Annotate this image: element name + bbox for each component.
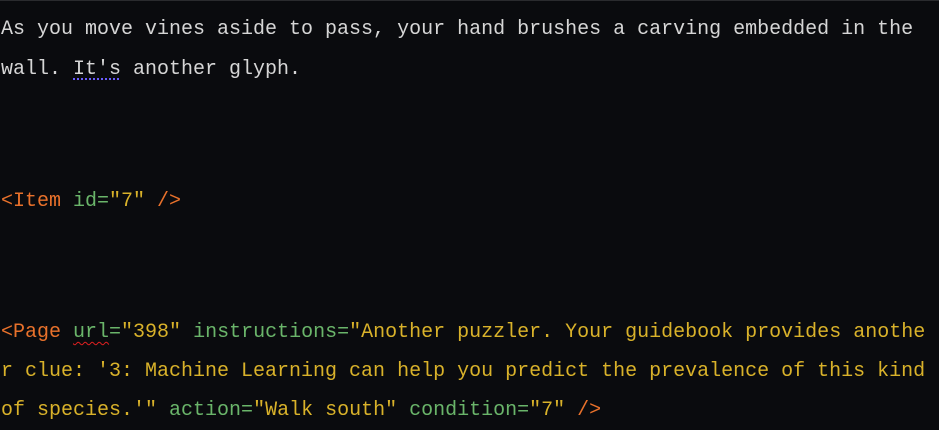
code block: Page tag: <Page url="398" instructions="Another puzzler. Your guidebook provides anothe r clue: '3: Machine Learning can help you predict the prevalence of this kind of species.'" action="Walk south" condition="7" /> <box>1 321 925 422</box>
code line: Item tag: <Item id="7" /> <box>1 190 181 213</box>
text block: narration: As you move vines aside to pass, your hand brushes a carving embedded in the wall. It's another glyph. <box>1 18 913 81</box>
